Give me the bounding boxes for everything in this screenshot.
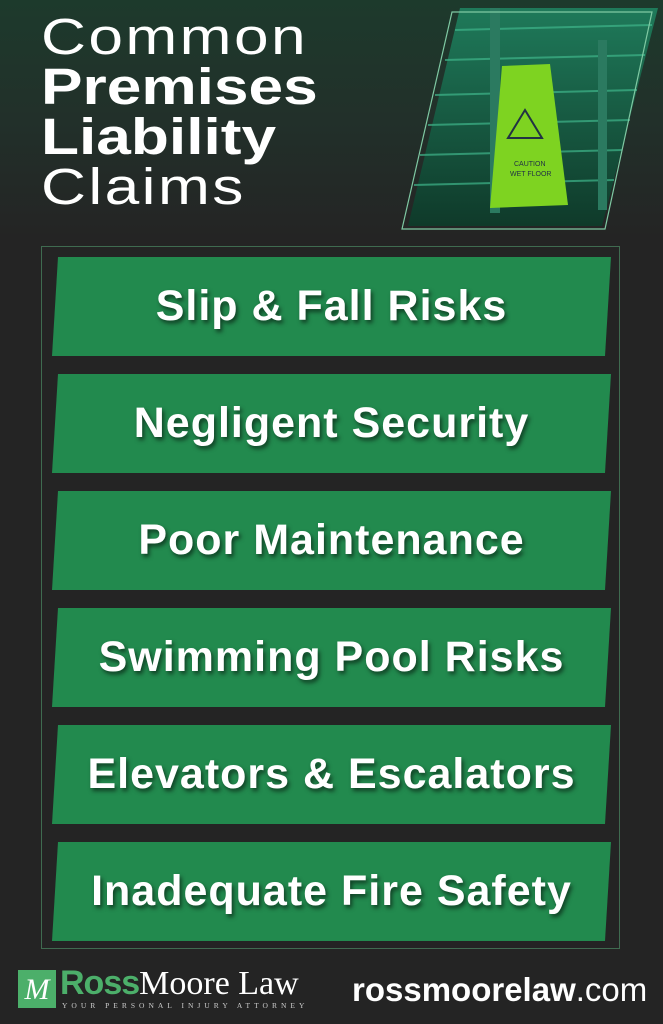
bar: Negligent Security: Negligent Security <box>134 399 529 447</box>
bar: Elevators & Escalators: Elevators & Escalators <box>87 750 576 798</box>
logo: YOUR PERSONAL INJURY ATTORNEY <box>62 1001 308 1010</box>
title: Premises <box>41 58 318 115</box>
title <box>41 8 318 215</box>
website url: rossmoorelaw.com <box>352 971 647 1008</box>
logo <box>18 964 308 1010</box>
bar: Poor Maintenance: Poor Maintenance <box>138 516 525 564</box>
photo: caution wet floor sign: CAUTION <box>514 161 546 168</box>
bar: Poor Maintenance <box>52 491 611 590</box>
icon: M logo: M <box>24 973 50 1006</box>
title: Claims <box>41 158 246 215</box>
bar: Slip & Fall Risks <box>52 257 611 356</box>
title: Common <box>41 8 308 65</box>
title: Liability <box>41 108 276 165</box>
bar: Negligent Security <box>52 374 611 473</box>
bar: Swimming Pool Risks: Swimming Pool Risks <box>99 633 564 681</box>
bar: Swimming Pool Risks <box>52 608 611 707</box>
photo: caution wet floor sign: WET FLOOR <box>510 171 551 178</box>
bar: Elevators & Escalators <box>52 725 611 824</box>
bar: Slip & Fall Risks: Slip & Fall Risks <box>156 282 507 330</box>
bar: Inadequate Fire Safety: Inadequate Fire Safety <box>91 867 572 915</box>
logo: RossMoore Law <box>60 964 299 1002</box>
bar: Inadequate Fire Safety <box>52 842 611 941</box>
photo: caution wet floor sign <box>401 8 658 230</box>
panel frame <box>41 246 620 949</box>
icon: M logo <box>18 970 56 1008</box>
